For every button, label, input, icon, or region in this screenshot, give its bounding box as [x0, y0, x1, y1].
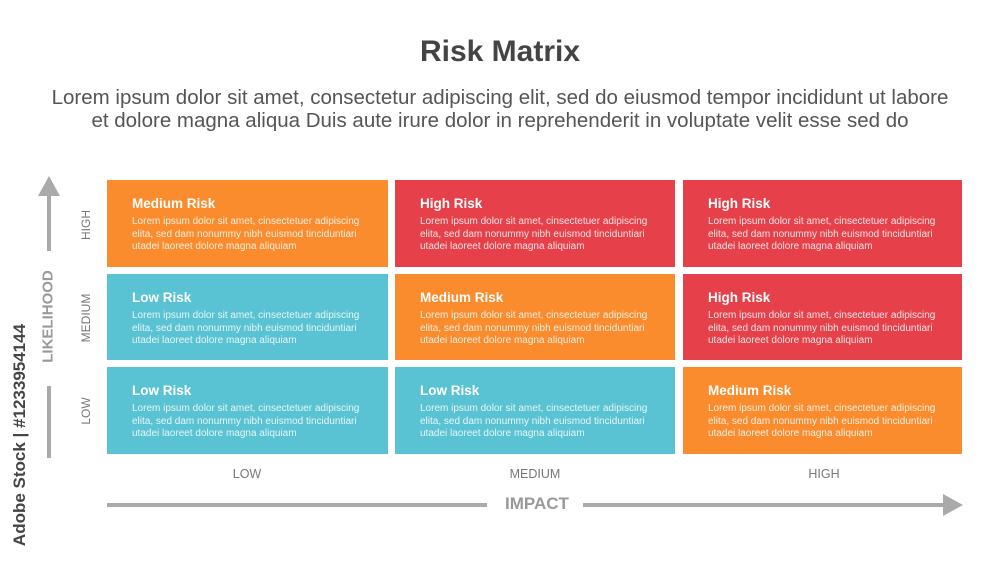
matrix grid	[107, 180, 962, 454]
arrow: likelihood axis	[38, 176, 60, 458]
cell: low risk (low/low): Lorem ipsum dolor sit amet, cinsectetuer adipiscing	[132, 403, 359, 414]
cell: medium risk (medium/medium): utadei laoreet dolore magna aliquiam	[420, 335, 585, 346]
cell: medium risk (medium/medium): elita, sed dam nonummy nibh euismod tinciduntiari	[420, 322, 645, 334]
cell: medium risk (medium/medium): Medium Risk	[420, 290, 503, 305]
subtitle: Lorem ipsum dolor sit amet, consectetur adipiscing elit, sed do eiusmod tempor incididunt ut labore	[52, 86, 948, 109]
cell: medium risk (high/low): Lorem ipsum dolor sit amet, cinsectetuer adipiscing	[132, 216, 359, 227]
cell: medium risk (high/low)	[107, 180, 388, 267]
cell: high risk (high/high): elita, sed dam nonummy nibh euismod tinciduntiari	[708, 228, 933, 240]
cell: high risk (high/medium): Lorem ipsum dolor sit amet, cinsectetuer adipiscing	[420, 216, 647, 227]
cell: low risk (low/low): utadei laoreet dolore magna aliquiam	[132, 428, 297, 439]
cell: low risk (low/low): elita, sed dam nonummy nibh euismod tinciduntiari	[132, 416, 357, 426]
cell: high risk (medium/high): utadei laoreet dolore magna aliquiam	[708, 335, 873, 346]
cell: low risk (medium/low): utadei laoreet dolore magna aliquiam	[132, 335, 297, 346]
title: Risk Matrix	[420, 35, 580, 68]
cell: medium risk (low/high): utadei laoreet dolore magna aliquiam	[708, 428, 873, 439]
cell: high risk (high/medium): High Risk	[420, 196, 482, 211]
cell: medium risk (medium/medium)	[395, 274, 675, 360]
cell: low risk (low/low)	[107, 367, 388, 454]
cell: medium risk (high/low): utadei laoreet dolore magna aliquiam	[132, 241, 297, 252]
cell: low risk (low/medium): elita, sed dam nonummy nibh euismod tinciduntiari	[420, 416, 645, 426]
cell: high risk (high/medium): elita, sed dam nonummy nibh euismod tinciduntiari	[420, 228, 645, 240]
cell: low risk (low/low): Low Risk	[132, 383, 191, 398]
cell: low risk (low/medium)	[395, 367, 675, 454]
cell: low risk (medium/low): Low Risk	[132, 290, 191, 305]
cell: low risk (low/medium): utadei laoreet dolore magna aliquiam	[420, 428, 585, 439]
cell: medium risk (low/high): Medium Risk	[708, 383, 791, 398]
cell: medium risk (low/high): elita, sed dam nonummy nibh euismod tinciduntiari	[708, 416, 933, 426]
row label: medium: MEDIUM	[79, 294, 93, 342]
cell: high risk (high/medium)	[395, 180, 675, 267]
cell: medium risk (high/low): elita, sed dam nonummy nibh euismod tinciduntiari	[132, 228, 357, 240]
cell: medium risk (low/high): Lorem ipsum dolor sit amet, cinsectetuer adipiscing	[708, 403, 935, 414]
cell: medium risk (high/low): Medium Risk	[132, 196, 215, 211]
cell: high risk (medium/high): elita, sed dam nonummy nibh euismod tinciduntiari	[708, 322, 933, 334]
axis label: likelihood: LIKELIHOOD	[40, 270, 56, 363]
arrow: impact axis	[107, 494, 963, 516]
subtitle: et dolore magna aliqua Duis aute irure dolor in reprehenderit in voluptate velit esse sed do	[91, 109, 909, 132]
cell: low risk (low/medium): Lorem ipsum dolor sit amet, cinsectetuer adipiscing	[420, 403, 647, 414]
cell: high risk (high/high): utadei laoreet dolore magna aliquiam	[708, 241, 873, 252]
cell: medium risk (low/high)	[683, 367, 962, 454]
cell: high risk (high/high): High Risk	[708, 196, 770, 211]
row label: high: HIGH	[79, 210, 93, 240]
cell: high risk (medium/high)	[683, 274, 962, 360]
column label: high: HIGH	[808, 467, 840, 481]
cell: low risk (medium/low)	[107, 274, 388, 360]
cell: low risk (medium/low): Lorem ipsum dolor sit amet, cinsectetuer adipiscing	[132, 310, 359, 321]
watermark text: Adobe Stock | #1233954144	[10, 324, 29, 546]
cell: medium risk (medium/medium): Lorem ipsum dolor sit amet, cinsectetuer adipiscing	[420, 310, 647, 321]
cell: high risk (high/medium): utadei laoreet dolore magna aliquiam	[420, 241, 585, 252]
cell: high risk (high/high): Lorem ipsum dolor sit amet, cinsectetuer adipiscing	[708, 216, 935, 227]
axis label: impact: IMPACT	[505, 494, 569, 513]
cell: low risk (medium/low): elita, sed dam nonummy nibh euismod tinciduntiari	[132, 322, 357, 334]
cell: low risk (low/medium): Low Risk	[420, 383, 479, 398]
column label: low: LOW	[233, 467, 261, 481]
column label: medium: MEDIUM	[510, 467, 560, 481]
subtitle	[52, 86, 948, 132]
cell: high risk (medium/high): Lorem ipsum dolor sit amet, cinsectetuer adipiscing	[708, 310, 935, 321]
row label: low: LOW	[79, 397, 93, 425]
cell: high risk (high/high)	[683, 180, 962, 267]
cell: high risk (medium/high): High Risk	[708, 290, 770, 305]
